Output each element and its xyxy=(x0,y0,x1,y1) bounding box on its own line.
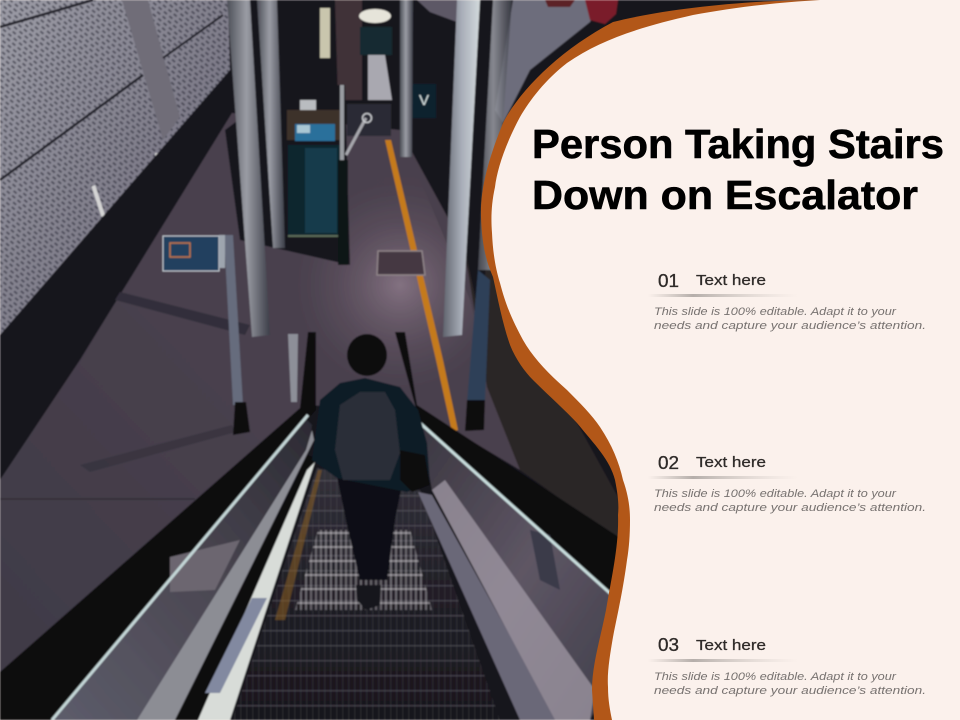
ceiling lamp xyxy=(359,9,391,23)
hanging sign xyxy=(360,27,392,55)
item 03: 03 xyxy=(658,635,679,655)
title xyxy=(532,121,944,218)
escalator steps xyxy=(232,468,555,720)
left handrail xyxy=(52,415,308,720)
title: Down on Escalator xyxy=(532,172,918,218)
legs xyxy=(337,477,403,580)
escalator right skirt xyxy=(395,332,625,610)
escalator right glass xyxy=(420,423,625,720)
item 01: 01 xyxy=(658,271,679,291)
item 03 xyxy=(648,635,926,697)
short bollard xyxy=(288,334,298,402)
elevator xyxy=(225,85,372,265)
title: Person Taking Stairs xyxy=(532,121,944,167)
item 03: needs and capture your audience’s attention. xyxy=(654,685,926,697)
V platform sign xyxy=(412,84,436,118)
upper right concrete wall xyxy=(495,0,600,123)
item 02: Text here xyxy=(696,454,766,471)
background lit strip xyxy=(368,55,392,100)
wayfinding sign and post xyxy=(163,235,250,435)
floor hatch xyxy=(377,251,425,275)
item 02: This slide is 100% editable. Adapt it to your xyxy=(654,488,898,500)
item 03: This slide is 100% editable. Adapt it to your xyxy=(654,671,898,683)
person from behind xyxy=(312,334,430,610)
jacket xyxy=(312,378,430,492)
right balustrade strip xyxy=(418,492,557,720)
item 01: Text here xyxy=(696,272,766,289)
item 03: Text here xyxy=(696,637,766,654)
cream content panel xyxy=(491,0,960,720)
shoes xyxy=(356,585,381,610)
item 01: needs and capture your audience’s attention. xyxy=(654,320,926,332)
left balustrade strips xyxy=(137,430,314,720)
escalator left skirt xyxy=(0,332,316,720)
orange safety line xyxy=(385,140,458,432)
item 01: This slide is 100% editable. Adapt it to your xyxy=(654,306,898,318)
escalator left glass xyxy=(52,418,312,720)
item 02: needs and capture your audience’s attention. xyxy=(654,502,926,514)
station floor xyxy=(0,113,520,672)
bag xyxy=(400,450,430,492)
item 01 xyxy=(648,271,926,332)
curved brown border xyxy=(481,0,960,720)
right handrail xyxy=(420,423,612,595)
backpack xyxy=(335,392,400,480)
item 02: 02 xyxy=(658,453,679,473)
dark wall right of floor xyxy=(462,230,625,545)
dark floor band beside wall xyxy=(0,70,232,480)
information board xyxy=(347,104,391,136)
item 02 xyxy=(648,453,926,514)
far escalator xyxy=(335,0,362,100)
station pillars xyxy=(227,0,512,431)
perforated station wall xyxy=(0,0,230,335)
V platform sign: V xyxy=(419,92,429,109)
head xyxy=(347,334,387,376)
